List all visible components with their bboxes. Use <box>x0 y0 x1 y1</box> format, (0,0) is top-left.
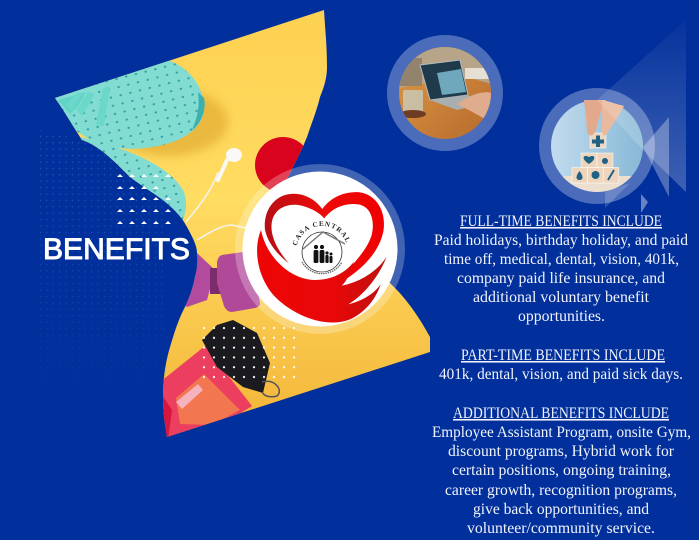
icon: pink water bottle <box>160 320 279 445</box>
icon: hand <box>457 92 492 120</box>
title: BENEFITS <box>43 233 190 266</box>
white triangle markers <box>117 174 171 224</box>
additional body: volunteer/community service. <box>467 520 655 537</box>
icon: glass of water <box>403 90 426 118</box>
photo circle: health blocks <box>539 88 655 204</box>
blue dot field <box>40 130 163 380</box>
full-time body: Paid holidays, birthday holiday, and paid <box>434 232 688 249</box>
icon: medical blocks <box>572 133 619 183</box>
icon: earphones <box>186 148 246 240</box>
icon: red felt circle <box>255 137 304 190</box>
icon: family <box>314 245 332 263</box>
icon: purple dumbbell <box>180 252 260 312</box>
photo panel: fitness items on yellow <box>55 10 430 437</box>
additional body: discount programs, Hybrid work for <box>448 443 675 460</box>
logo seal <box>292 221 350 274</box>
additional body: career growth, recognition programs, <box>445 482 677 499</box>
shoe shadow <box>108 88 228 156</box>
icon: laptop <box>420 60 468 100</box>
icon: heart and hand <box>257 192 387 323</box>
full-time body <box>434 232 688 325</box>
white dot grid <box>202 326 296 378</box>
text block: part-time benefits <box>439 347 683 383</box>
heading: part-time: PART-TIME BENEFITS INCLUDE <box>461 347 665 364</box>
logo badge <box>235 164 405 334</box>
full-time body: opportunities. <box>518 308 605 325</box>
part-time body: 401k, dental, vision, and paid sick days. <box>439 366 683 383</box>
text block: full-time benefits <box>434 213 688 325</box>
additional body: certain positions, ongoing training, <box>452 462 671 479</box>
additional body: give back opportunities, and <box>473 501 649 518</box>
full-time body: time off, medical, dental, vision, 401k, <box>444 251 679 268</box>
full-time body: company paid life insurance, and <box>457 270 665 287</box>
additional body: Employee Assistant Program, onsite Gym, <box>432 424 691 441</box>
icon: lower sneaker <box>75 136 186 224</box>
logo seal: CASA CENTRAL <box>292 221 350 246</box>
photo circle: laptop <box>387 35 503 151</box>
additional body <box>432 424 691 537</box>
heading: additional: ADDITIONAL BENEFITS INCLUDE <box>453 405 669 422</box>
text block: additional benefits <box>432 405 691 537</box>
icon: fingers <box>584 100 624 136</box>
full-time body: additional voluntary benefit <box>473 289 650 306</box>
icon: upper sneaker <box>50 60 205 149</box>
heading: full-time: FULL-TIME BENEFITS INCLUDE <box>460 213 662 230</box>
decorative triangles <box>597 20 686 213</box>
